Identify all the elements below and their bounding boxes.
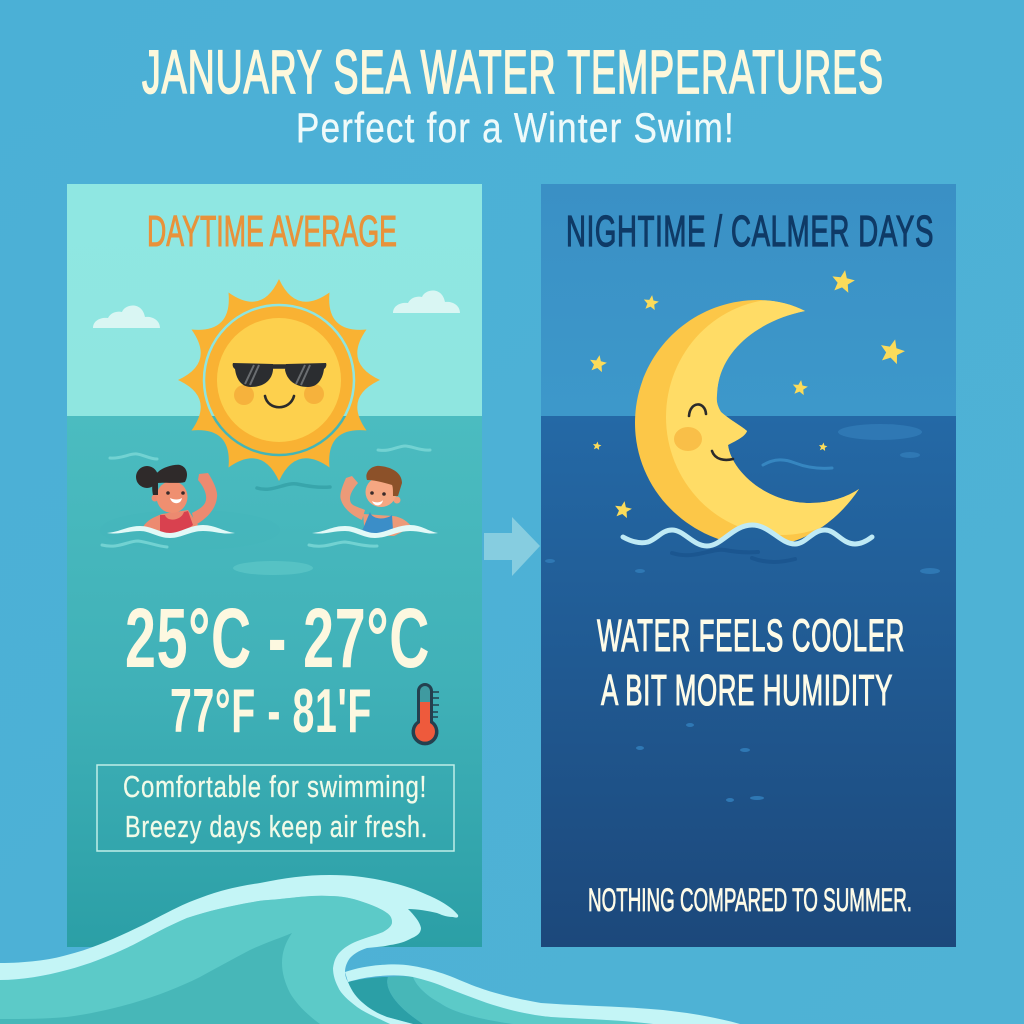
night ripples bbox=[545, 424, 940, 802]
lower wave mid bbox=[387, 976, 513, 1024]
swimmer: woman bbox=[136, 465, 217, 536]
stars bbox=[588, 268, 907, 519]
lower wave foam bbox=[345, 964, 740, 1024]
wave foam crest bbox=[0, 875, 458, 1024]
sun face bbox=[217, 318, 341, 442]
panel: daytime average bbox=[67, 184, 482, 947]
sun rays bbox=[178, 279, 380, 481]
sunglasses bbox=[233, 363, 326, 387]
icon: thermometer bbox=[412, 683, 439, 745]
foam: man's wave bbox=[312, 525, 438, 538]
sun ring bbox=[204, 305, 354, 455]
panel: nighttime bbox=[541, 184, 956, 947]
arrow bbox=[484, 517, 540, 576]
daytime heading: DAYTIME AVERAGE bbox=[147, 207, 397, 256]
subtitle: Perfect for a Winter Swim! bbox=[296, 104, 735, 151]
moon eye bbox=[689, 404, 706, 416]
wave illustration bbox=[0, 875, 740, 1024]
sun smile bbox=[265, 396, 294, 407]
night sky bbox=[541, 184, 956, 416]
celsius range: 25°C - 27°C bbox=[125, 591, 430, 685]
callout: swimming comfort: Comfortable for swimming! bbox=[123, 769, 427, 804]
icon: sun with sunglasses bbox=[178, 279, 380, 481]
daytime sky bbox=[67, 184, 482, 416]
foam: moon wave bbox=[623, 525, 872, 546]
sun cheeks bbox=[234, 384, 324, 405]
night sea bbox=[541, 416, 956, 947]
swimmer: man bbox=[340, 466, 412, 536]
moon cheek bbox=[674, 427, 702, 451]
foam: woman's wave bbox=[107, 525, 235, 538]
moon smile bbox=[712, 451, 733, 460]
callout: swimming comfort: Breezy days keep air fresh. bbox=[125, 809, 428, 844]
fahrenheit range: 77°F - 81'F bbox=[170, 677, 372, 746]
icon: left cloud bbox=[93, 305, 160, 328]
daytime sea bbox=[67, 416, 482, 947]
wave body bbox=[0, 896, 392, 1024]
wave shadow bbox=[0, 933, 320, 1024]
lower wave dark bbox=[348, 977, 423, 1024]
icon: right cloud bbox=[393, 290, 460, 313]
sea ripples bbox=[100, 446, 430, 575]
callout: swimming comfort bbox=[97, 765, 454, 851]
lower wave light bbox=[413, 977, 653, 1024]
icon: smiling crescent moon bbox=[635, 300, 859, 542]
